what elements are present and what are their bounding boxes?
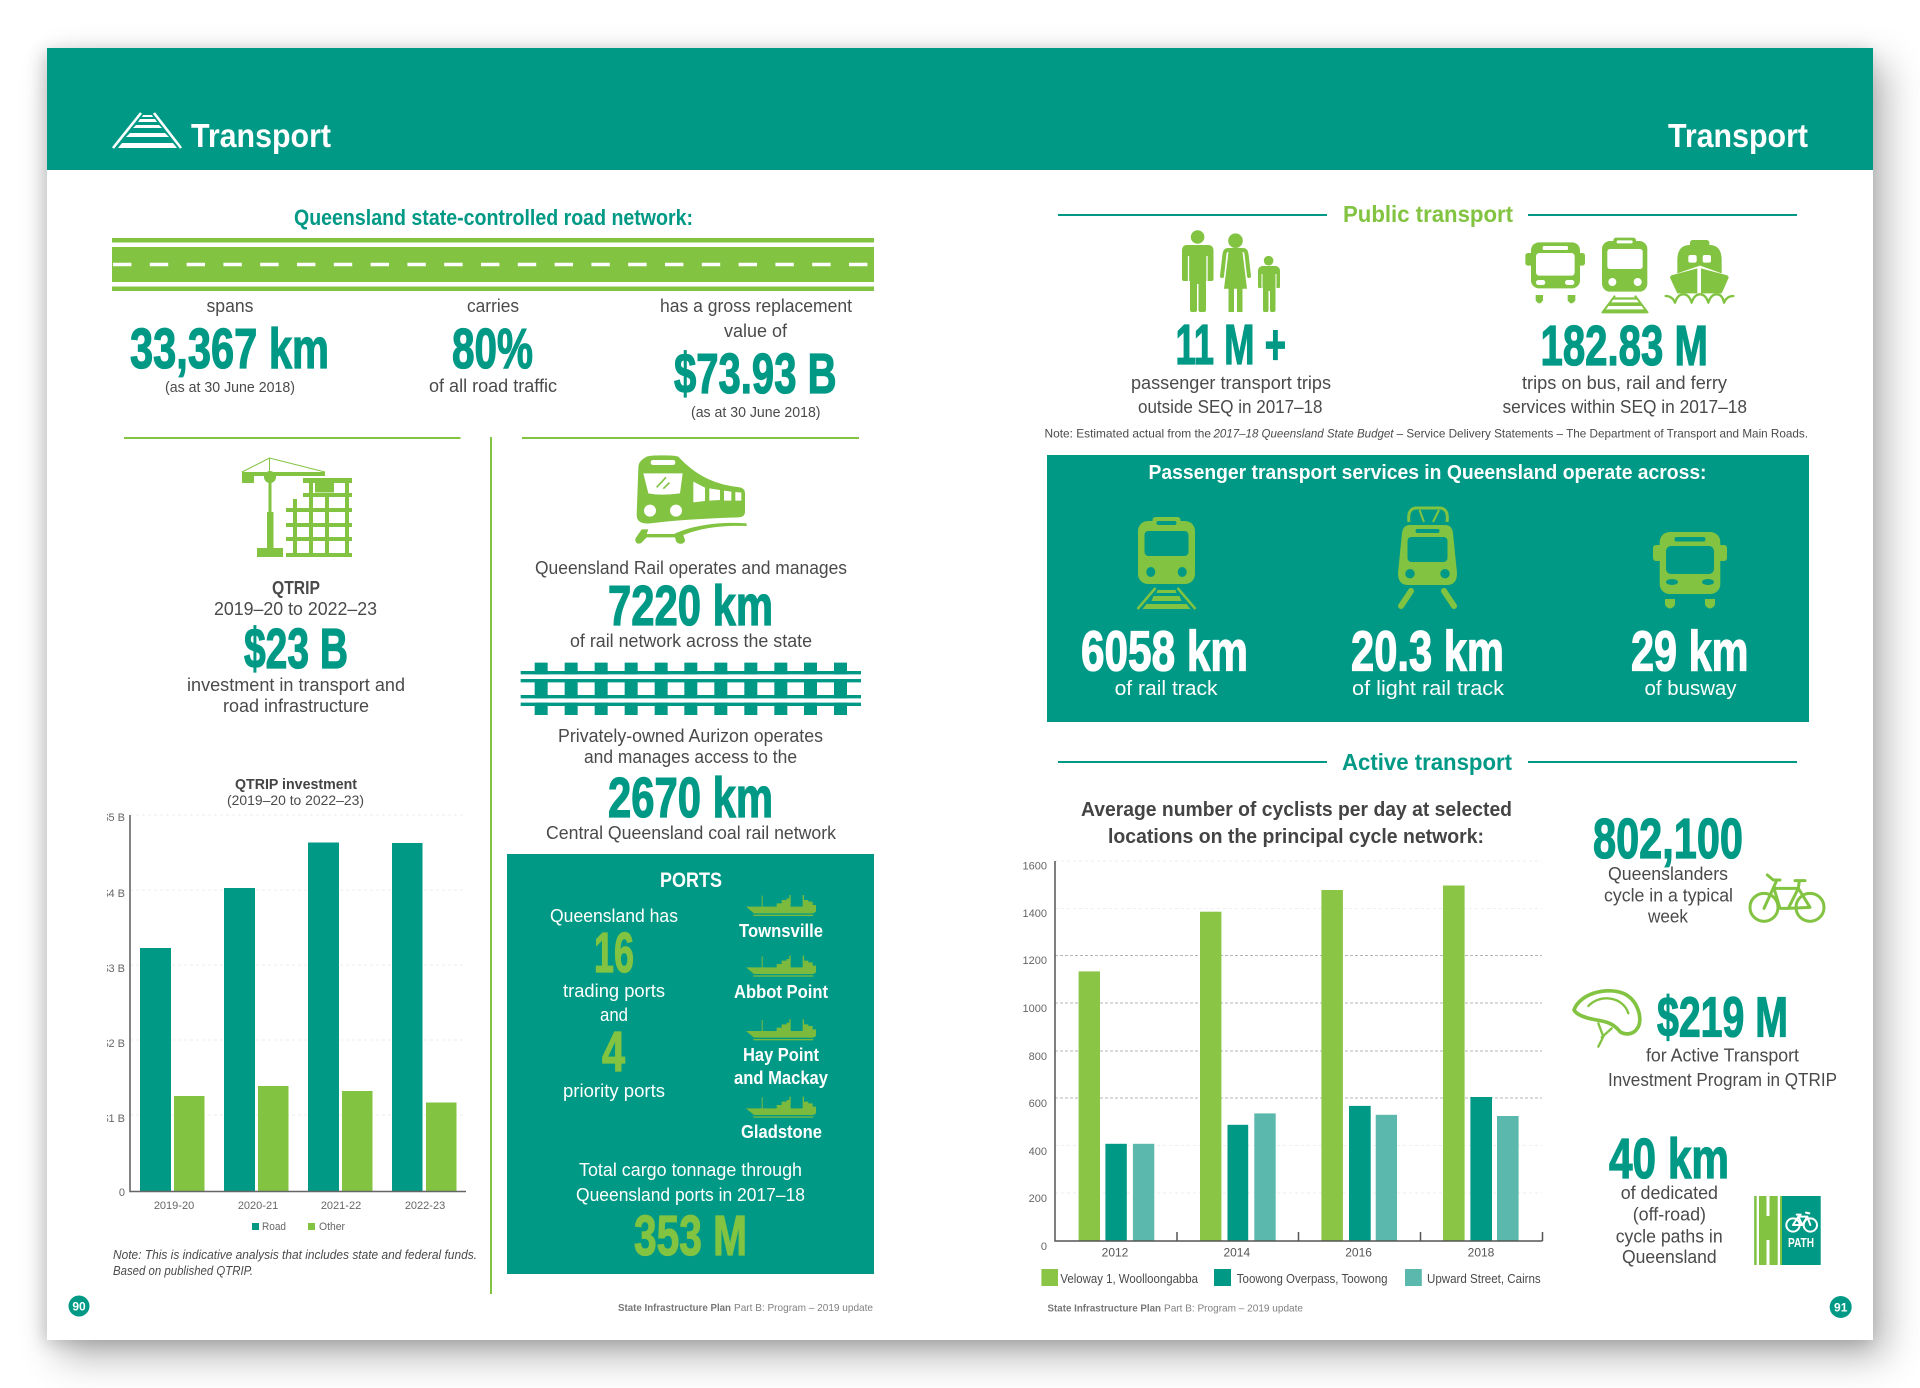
stat: Aurizon [546, 726, 837, 843]
x axis labels: 2019-20 [154, 1200, 194, 1212]
road graphic [112, 238, 874, 291]
stat: light rail: 20.3 km [1351, 620, 1504, 684]
stat: cycle paths: of dedicated [1621, 1183, 1718, 1203]
bars: Veloway 1 [1079, 886, 1465, 1241]
legend [252, 1221, 345, 1233]
y axis labels: $3 B [102, 963, 125, 975]
sign label: PATH [1788, 1235, 1814, 1250]
ports counts: trading ports [563, 981, 665, 1001]
x axis labels: 2018 [1468, 1246, 1495, 1260]
x axis labels: 2016 [1345, 1246, 1372, 1260]
icon: train on rails [1602, 238, 1648, 313]
stat: QTRIP total: investment in transport and [187, 675, 405, 695]
footer right: Part B: Program – 2019 update [1164, 1303, 1303, 1315]
header band [47, 48, 1873, 170]
stat: road traffic: of all road traffic [429, 376, 557, 396]
footer left: Part B: Program – 2019 update [734, 1302, 873, 1314]
legend: Toowong Overpass, Toowong [1237, 1272, 1388, 1286]
stat: cycle paths [1609, 1127, 1729, 1267]
chart note: Note: This is indicative analysis that includes state and federal funds. [113, 1248, 477, 1262]
heading: public transport: Public transport [1343, 201, 1513, 227]
stat: Queensland Rail: of rail network across the state [570, 631, 812, 651]
heading: left Transport: Transport [191, 117, 331, 154]
panel heading: Passenger transport services in Queensland operate across: [1148, 462, 1706, 484]
stat: road traffic: 80% [452, 317, 533, 381]
legend: Upward Street, Cairns [1427, 1272, 1541, 1286]
footer right [1048, 1303, 1303, 1315]
stat: cycle paths: (off-road) [1633, 1205, 1706, 1225]
cargo tonnage: 353 M [634, 1204, 747, 1268]
port: Townsville: Townsville [739, 921, 823, 941]
legend: Veloway 1, Woolloongabba [1060, 1272, 1198, 1286]
panel: passenger transport services [1047, 455, 1809, 722]
x axis labels: 2022-23 [405, 1200, 445, 1212]
stat: replacement value: $73.93 B [674, 342, 836, 406]
stat: busway [1631, 620, 1748, 700]
stat: cyclists per week: Queenslanders [1608, 864, 1728, 884]
stat: busway: of busway [1644, 678, 1736, 700]
y axis labels: 1000 [1023, 1003, 1047, 1015]
stat: Queensland Rail [535, 558, 847, 651]
stat: QTRIP total: $23 B [244, 617, 348, 681]
y axis labels: 0 [119, 1187, 125, 1199]
stat: busway: 29 km [1631, 620, 1748, 684]
x axis labels [1102, 1246, 1495, 1260]
stat: active transport funding: for Active Transport [1646, 1046, 1799, 1066]
stat: Aurizon: Central Queensland coal rail network [546, 823, 837, 843]
ports counts: 16 [594, 921, 634, 985]
bar chart: QTRIP investment [102, 776, 466, 1233]
stat: QTRIP total: road infrastructure [223, 696, 369, 716]
bars: Other [174, 1086, 456, 1191]
stat: outside SEQ trips [1131, 313, 1331, 417]
y axis labels: $4 B [102, 888, 125, 900]
stat: cyclists per week [1593, 807, 1743, 927]
stat: cycle paths: cycle paths in [1616, 1227, 1723, 1247]
heading: active transport: Active transport [1342, 749, 1512, 775]
stat: road traffic [429, 296, 557, 396]
y axis labels: 400 [1029, 1146, 1047, 1158]
chart title: QTRIP investment [235, 776, 357, 793]
x axis labels [154, 1200, 445, 1212]
chart title: (2019–20 to 2022–23) [227, 792, 364, 808]
stat: road length: (as at 30 June 2018) [165, 379, 295, 396]
port: Gladstone [741, 1097, 822, 1142]
stat: replacement value: value of [724, 321, 788, 341]
stat: within SEQ trips: services within SEQ in 2017–18 [1502, 397, 1747, 417]
chart note: Based on published QTRIP. [113, 1264, 253, 1278]
y axis labels [1023, 860, 1047, 1253]
footer left [618, 1302, 873, 1314]
stat: rail track: 6058 km [1081, 620, 1248, 684]
page number 91 [1830, 1296, 1852, 1318]
stat: active transport funding [1608, 986, 1837, 1090]
port: Townsville [739, 895, 823, 941]
stat: within SEQ trips: 182.83 M [1540, 314, 1708, 378]
legend: Other [319, 1221, 345, 1233]
y axis labels: 1200 [1023, 955, 1047, 967]
panel: ports [507, 854, 874, 1274]
stat: QTRIP total: 2019–20 to 2022–23 [214, 599, 377, 619]
port: Hay Point and Mackay: and Mackay [734, 1068, 828, 1088]
y axis labels: $1 B [102, 1113, 125, 1125]
chart heading: Average number of cyclists per day at selected [1081, 799, 1512, 821]
stat: road length: spans [206, 296, 254, 316]
y axis labels: 1400 [1023, 908, 1047, 920]
stat: road length [130, 296, 329, 396]
icon: family [1182, 230, 1280, 312]
y axis labels: 800 [1029, 1051, 1047, 1063]
port: Hay Point and Mackay: Hay Point [743, 1045, 819, 1065]
ports counts: 4 [602, 1020, 625, 1084]
stat: Aurizon: Privately-owned Aurizon operates [558, 726, 823, 746]
footer left: State Infrastructure Plan [618, 1302, 731, 1314]
stat: light rail [1351, 620, 1505, 700]
y axis labels: 600 [1029, 1098, 1047, 1110]
stat: replacement value: has a gross replacement [660, 296, 852, 316]
x axis labels: 2014 [1223, 1246, 1250, 1260]
stat: replacement value: (as at 30 June 2018) [691, 404, 821, 421]
stat: outside SEQ trips: 11 M + [1176, 313, 1286, 377]
chart heading [1081, 799, 1512, 848]
icon: ferry [1666, 240, 1733, 303]
page number 91: 91 [1834, 1300, 1848, 1314]
stat: cycle paths: 40 km [1609, 1127, 1729, 1191]
stat: replacement value [660, 296, 852, 421]
bar chart: cyclists [1023, 860, 1542, 1286]
heading: right Transport: Transport [1668, 117, 1808, 154]
icon: rail track [113, 113, 181, 148]
y axis labels: 1600 [1023, 860, 1047, 872]
note: budget source: 2017–18 Queensland State Budget [1213, 426, 1394, 440]
stat: cyclists per week: cycle in a typical [1604, 886, 1733, 906]
stat: cyclists per week: week [1647, 907, 1689, 927]
icon: bus [1653, 532, 1727, 608]
y axis labels: $2 B [102, 1038, 125, 1050]
legend: Road [262, 1221, 286, 1233]
icon: bus [1525, 242, 1585, 303]
stat: rail track: of rail track [1115, 678, 1219, 700]
stat: Aurizon: and manages access to the [584, 747, 797, 767]
heading: road network: Queensland state-controlled road network: [294, 205, 693, 230]
chart note [113, 1248, 477, 1278]
footer right: State Infrastructure Plan [1048, 1303, 1161, 1315]
icon: rail track band [521, 663, 861, 715]
legend [1041, 1269, 1541, 1286]
stat: QTRIP total [187, 578, 405, 716]
ports counts: priority ports [563, 1081, 665, 1101]
port: Gladstone: Gladstone [741, 1122, 822, 1142]
stat: cyclists per week: 802,100 [1593, 807, 1743, 871]
icon: tram [1398, 508, 1457, 606]
stat: light rail: of light rail track [1352, 678, 1505, 700]
cargo tonnage [576, 1160, 805, 1268]
icon: helmet [1574, 991, 1640, 1047]
bars: Road [140, 842, 422, 1191]
stat: outside SEQ trips: passenger transport trips [1131, 373, 1331, 393]
chart title [227, 776, 364, 808]
stat: within SEQ trips [1502, 314, 1747, 417]
sign bicycle [1786, 1213, 1817, 1232]
stat: active transport funding: Investment Program in QTRIP [1608, 1070, 1837, 1090]
port: Hay Point and Mackay [734, 1019, 828, 1088]
note: budget source [1044, 426, 1808, 440]
x axis labels: 2021-22 [321, 1200, 361, 1212]
y axis labels: $5 B [102, 812, 125, 824]
icon: side view train [635, 455, 747, 544]
y axis labels: 200 [1029, 1193, 1047, 1205]
ports counts: Queensland has [550, 906, 678, 926]
chart heading: locations on the principal cycle network: [1108, 826, 1484, 848]
y axis labels [107, 814, 125, 1196]
stat: active transport funding: $219 M [1657, 986, 1788, 1050]
y axis labels: 0 [1041, 1241, 1047, 1253]
stat: Queensland Rail: 7220 km [608, 574, 773, 638]
ports counts: and [600, 1005, 628, 1025]
icon: train [1138, 517, 1196, 609]
note: budget source: – Service Delivery Statements – The Department of Transport and Main Roads. [1397, 426, 1808, 440]
bars: Upward Street [1133, 1113, 1519, 1241]
stat: Queensland Rail: Queensland Rail operates and manages [535, 558, 847, 578]
cargo tonnage: Total cargo tonnage through [579, 1160, 802, 1180]
stat: outside SEQ trips: outside SEQ in 2017–18 [1138, 397, 1322, 417]
stat: rail track [1081, 620, 1248, 700]
icon: path sign [1754, 1196, 1821, 1265]
x axis labels: 2020-21 [238, 1200, 278, 1212]
note: budget source: Note: Estimated actual from the [1044, 426, 1211, 440]
icon: crane and building [242, 458, 352, 557]
ports heading: PORTS [660, 869, 722, 892]
port: Abbot Point: Abbot Point [734, 982, 828, 1002]
stat: cycle paths: Queensland [1622, 1247, 1717, 1267]
stat: Aurizon: 2670 km [608, 766, 773, 830]
stat: road length: 33,367 km [130, 317, 329, 381]
cargo tonnage: Queensland ports in 2017–18 [576, 1185, 805, 1205]
icon: bicycle [1750, 875, 1824, 921]
stat: road traffic: carries [467, 296, 519, 316]
ports counts [550, 906, 678, 1101]
page number 90: 90 [72, 1300, 86, 1314]
page number 90 [68, 1296, 90, 1316]
stat: QTRIP total: QTRIP [272, 578, 320, 598]
x axis labels: 2012 [1102, 1246, 1129, 1260]
stat: within SEQ trips: trips on bus, rail and ferry [1522, 373, 1727, 393]
bars: Toowong Overpass [1105, 1097, 1492, 1241]
port: Abbot Point [734, 956, 828, 1002]
